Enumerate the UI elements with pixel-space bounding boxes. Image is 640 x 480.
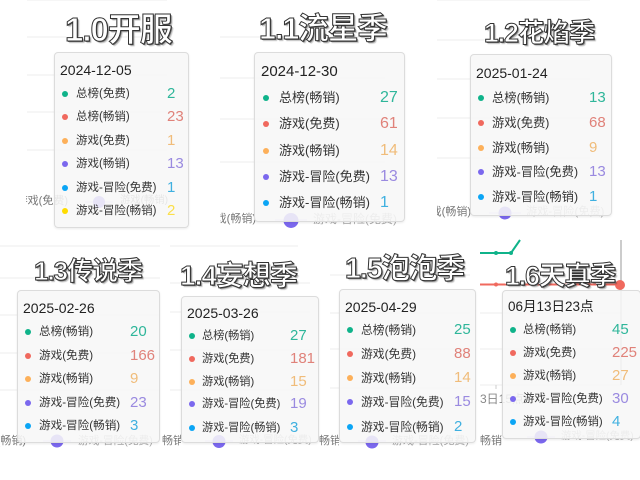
panel: 1.6 tooltip: 06月13日23点 <box>508 299 594 314</box>
panel: 1.3 tooltip: 2025-02-26 <box>23 300 95 316</box>
title: 1.4妄想季: 1.4妄想季 <box>180 260 297 291</box>
title: 1.5泡泡季: 1.5泡泡季 <box>345 253 464 285</box>
title: 1.0开服: 1.0开服 <box>65 11 172 48</box>
panel: 1.0 tooltip <box>54 52 189 228</box>
panel: 1.2 tooltip: 9 <box>589 139 597 156</box>
title: 1.3传说季: 1.3传说季 <box>34 256 142 286</box>
panel: 1.1 tooltip: 游戏(免费) <box>279 116 340 131</box>
panel: 1.5 tooltip: 88 <box>454 345 471 362</box>
panel: 1.5 tooltip: 游戏(免费) <box>361 347 416 361</box>
panel: 1.5 tooltip <box>339 289 476 443</box>
panel: 1.5 tooltip: 14 <box>454 369 471 386</box>
panel: 1.5 tooltip: 游戏-冒险(免费) <box>361 395 444 409</box>
panel: 1.0 tooltip: 2 <box>167 85 175 102</box>
title: 1.2花焰季: 1.2花焰季 <box>484 18 594 48</box>
panel: 1.1 tooltip: 2024-12-30 <box>261 63 338 80</box>
panel: 1.5 tooltip: 2025-04-29 <box>345 299 417 315</box>
panel: 1.6 tooltip: 30 <box>612 390 629 407</box>
panel: 1.0 tooltip: 1 <box>167 179 175 196</box>
panel: 1.5 tooltip: 15 <box>454 393 471 410</box>
panel: 1.4 tooltip: 总榜(畅销) <box>202 330 254 342</box>
panel: 1.3 tooltip: 9 <box>130 370 138 387</box>
faded legend fragments: 游戏-冒险(免费) <box>392 435 469 447</box>
panel: 1.3 tooltip <box>17 290 160 443</box>
panel: 1.6 tooltip: 4 <box>612 413 620 430</box>
panel: 1.1 tooltip: 游戏-冒险(免费) <box>279 169 370 184</box>
panel: 1.3 tooltip: 23 <box>130 394 147 411</box>
panel: 1.3 tooltip: 3 <box>130 417 138 434</box>
panel: 1.6 tooltip: 27 <box>612 367 629 384</box>
faded legend fragments: 游戏(畅销) <box>120 195 168 206</box>
panel: 1.0 tooltip: 23 <box>167 108 184 125</box>
panel: 1.4 tooltip <box>181 296 319 443</box>
panel: 1.6 tooltip: 游戏-冒险(免费) <box>523 393 603 405</box>
panel: 1.3 tooltip: 游戏-冒险(畅销) <box>39 419 120 432</box>
panel: 1.4 tooltip: 19 <box>290 395 307 412</box>
panel: 1.0 tooltip: 游戏-冒险(免费) <box>76 182 156 194</box>
faded legend fragments: 游戏-冒险(免费) <box>526 206 604 218</box>
panel: 1.2 tooltip: 游戏-冒险(免费) <box>492 165 578 179</box>
panel: 1.1 tooltip: 27 <box>380 89 398 106</box>
panel: 1.1 tooltip: 游戏(畅销) <box>279 143 340 158</box>
panel: 1.0 tooltip: 1 <box>167 132 175 149</box>
panel: 1.2 tooltip: 2025-01-24 <box>476 65 548 81</box>
panel: 1.6 tooltip: 游戏(免费) <box>523 347 576 359</box>
panel: 1.4 tooltip: 游戏(免费) <box>202 353 254 365</box>
panel: 1.0 tooltip: 游戏-冒险(畅销) <box>76 205 156 217</box>
panel: 1.4 tooltip: 27 <box>290 327 307 344</box>
panel: 1.2 tooltip: 1 <box>589 188 597 205</box>
panel: 1.6 tooltip: 225 <box>612 344 637 361</box>
panel: 1.1 tooltip: 1 <box>380 194 389 211</box>
panel: 1.2 tooltip: 游戏(畅销) <box>492 141 549 155</box>
panel: 1.1 tooltip: 总榜(畅销) <box>279 90 340 105</box>
panel: 1.2 tooltip: 13 <box>589 163 606 180</box>
panel: 1.2 tooltip: 13 <box>589 89 606 106</box>
panel: 1.1 tooltip: 14 <box>380 142 398 159</box>
panel: 1.5 tooltip: 总榜(畅销) <box>361 323 416 337</box>
title: 1.1流星季: 1.1流星季 <box>259 12 387 46</box>
panel: 1.6 tooltip <box>502 290 640 439</box>
panel: 1.4 tooltip: 游戏-冒险(免费) <box>202 398 280 410</box>
panel: 1.2 tooltip: 游戏(免费) <box>492 116 549 130</box>
panel: 1.3 tooltip: 游戏-冒险(免费) <box>39 396 120 409</box>
panel: 1.0 tooltip: 总榜(免费) <box>76 88 130 100</box>
panel: 1.5 tooltip: 游戏(畅销) <box>361 371 416 385</box>
panel: 1.1 tooltip: 13 <box>380 168 398 185</box>
panel: 1.2 tooltip <box>470 54 612 216</box>
panel: 1.6 tooltip: 游戏-冒险(畅销) <box>523 416 603 428</box>
panel: 1.0 tooltip: 13 <box>167 155 184 172</box>
panel: 1.6 tooltip: 游戏(畅销) <box>523 370 576 382</box>
panel: 1.2 tooltip: 总榜(畅销) <box>492 91 549 105</box>
panel: 1.0 tooltip: 游戏(畅销) <box>76 158 130 170</box>
panel: 1.4 tooltip: 2025-03-26 <box>187 305 259 321</box>
panel: 1.1 tooltip: 61 <box>380 115 398 132</box>
panel: 1.5 tooltip: 25 <box>454 321 471 338</box>
panel: 1.1 tooltip: 游戏-冒险(畅销) <box>279 195 370 210</box>
panel: 1.4 tooltip: 游戏(畅销) <box>202 376 254 388</box>
panel: 1.4 tooltip: 游戏-冒险(畅销) <box>202 422 280 434</box>
title: 1.6天真季: 1.6天真季 <box>505 261 615 291</box>
panel: 1.3 tooltip: 游戏(畅销) <box>39 372 93 385</box>
panel: 1.3 tooltip: 20 <box>130 323 147 340</box>
faded legend fragments: 游戏-冒险(免费) <box>78 435 153 447</box>
panel: 1.2 tooltip: 游戏-冒险(畅销) <box>492 190 578 204</box>
panel: 1.5 tooltip: 游戏-冒险(畅销) <box>361 420 444 434</box>
panel: 1.3 tooltip: 166 <box>130 347 155 364</box>
faded legend fragments: 游戏-冒险(免费) <box>239 435 312 446</box>
panel: 1.4 tooltip: 181 <box>290 350 315 367</box>
panel: 1.0 tooltip: 游戏(免费) <box>76 135 130 147</box>
panel: 1.4 tooltip: 15 <box>290 373 307 390</box>
panel: 1.6 tooltip: 总榜(畅销) <box>523 324 576 336</box>
faded legend fragments: 游戏-冒险(免费) <box>313 212 397 226</box>
panel: 1.0 tooltip: 2024-12-05 <box>60 62 132 78</box>
panel: 1.6 tooltip: 45 <box>612 321 629 338</box>
panel: 1.5 tooltip: 2 <box>454 418 462 435</box>
panel: 1.3 tooltip: 总榜(畅销) <box>39 325 93 338</box>
panel: 1.2 tooltip: 68 <box>589 114 606 131</box>
faded axis label: 3日15点 <box>480 392 524 406</box>
panel: 1.4 tooltip: 3 <box>290 419 298 436</box>
panel: 1.3 tooltip: 游戏(免费) <box>39 349 93 362</box>
panel: 1.1 tooltip <box>254 52 405 222</box>
panel: 1.0 tooltip: 2 <box>167 202 175 219</box>
faded legend fragments: 游戏-冒险(免费) <box>561 431 634 442</box>
panel: 1.0 tooltip: 总榜(畅销) <box>76 111 130 123</box>
